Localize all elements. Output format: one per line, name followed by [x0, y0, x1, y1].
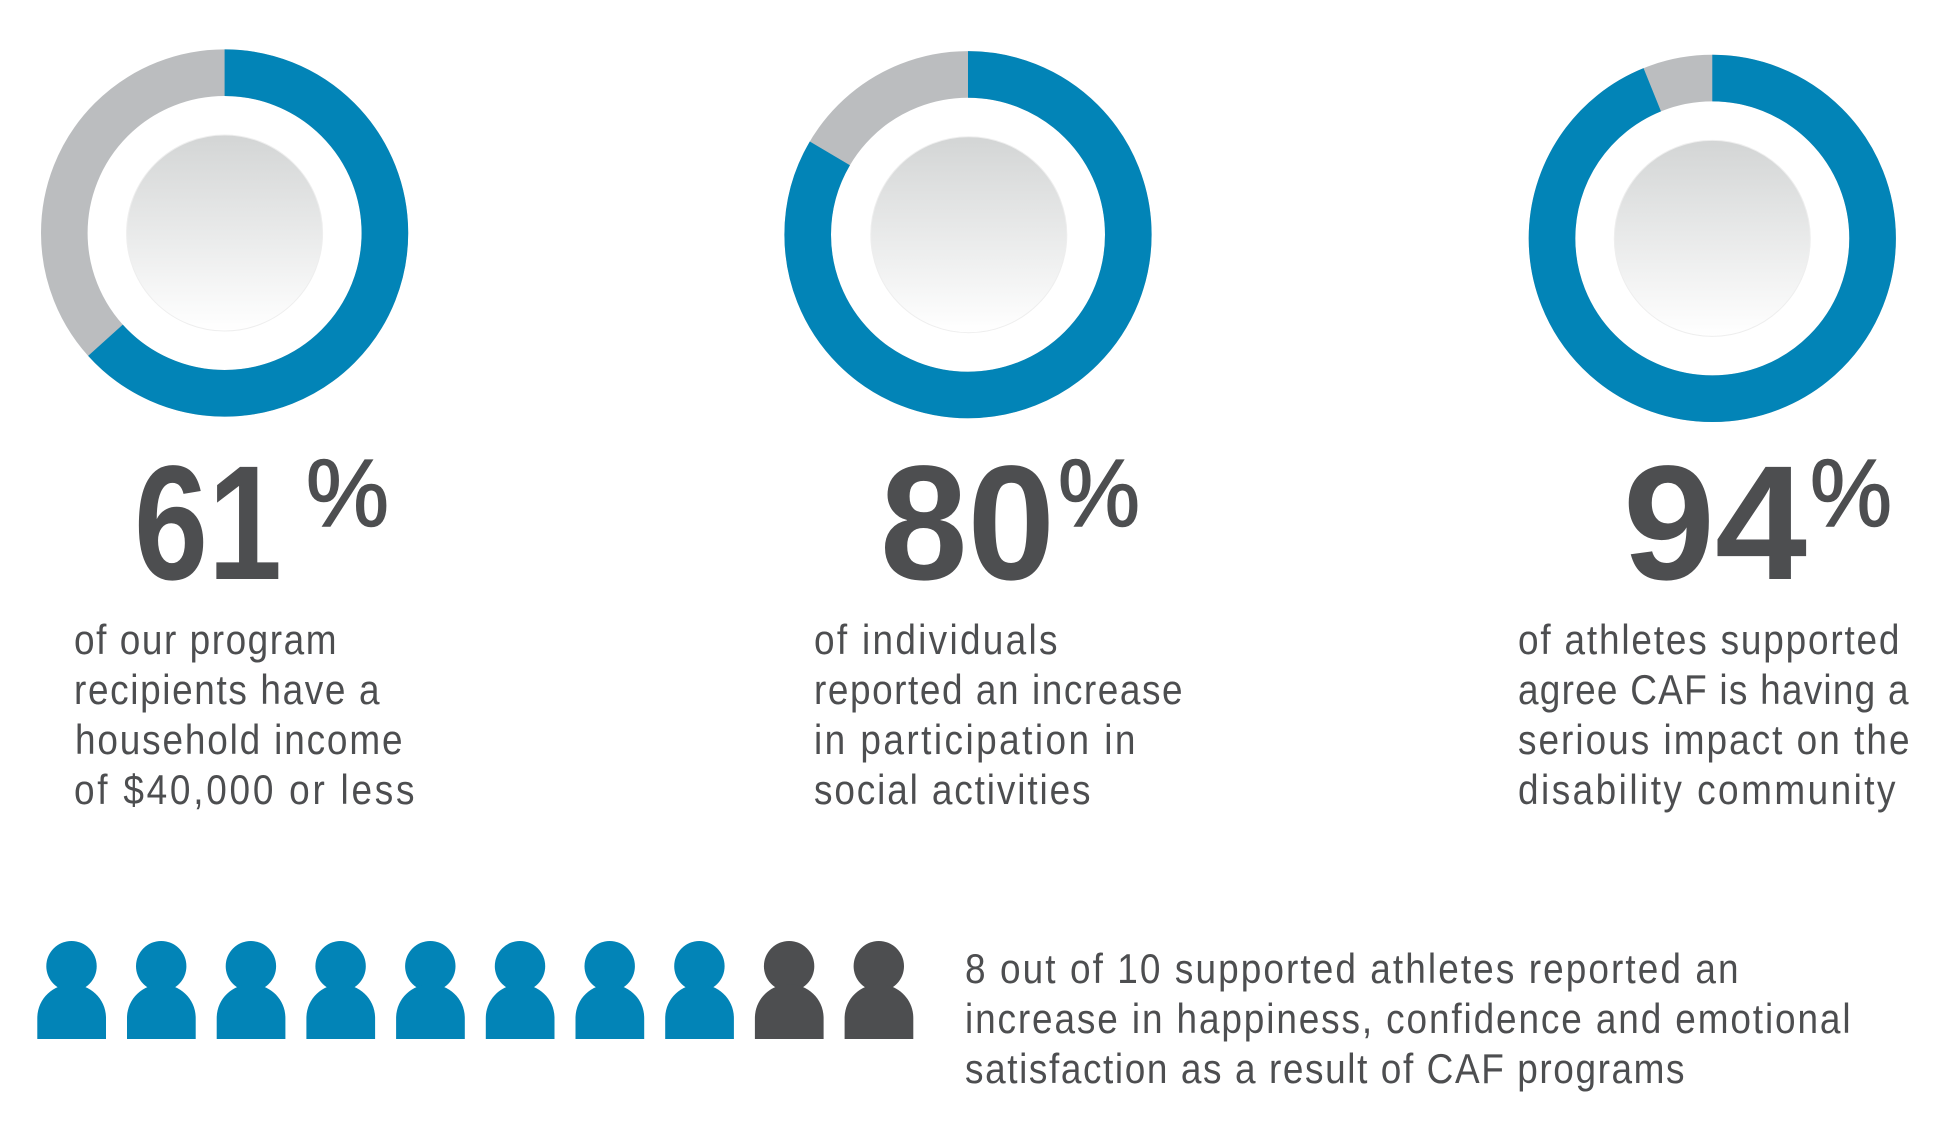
icon: person 8 — [665, 941, 734, 1039]
big number: 61%: 61 — [134, 431, 282, 614]
description: 61 percent: household income — [75, 717, 403, 764]
description: 94 percent: agree CAF is having a — [1518, 667, 1909, 714]
icon: person 7 — [576, 941, 644, 1039]
icon: person 5 — [396, 941, 465, 1039]
panel: 94 percent statistic — [1518, 78, 1910, 814]
description: 80 percent: reported an increase — [814, 667, 1183, 714]
description: 80 percent: in participation in — [814, 717, 1135, 764]
pictogram: ten people, eight highlighted — [37, 941, 913, 1039]
icon: person 9 — [755, 941, 824, 1039]
big number: 94% — [1623, 431, 1892, 614]
panel: 8 out of 10 athletes — [37, 941, 1851, 1093]
icon: person 4 — [306, 941, 375, 1039]
description: 94 percent: disability community — [1518, 767, 1896, 814]
big number: 80% — [880, 431, 1140, 614]
icon: person 10 — [845, 941, 913, 1039]
icon: person 2 — [127, 941, 196, 1039]
description: 61 percent: of our program — [74, 617, 337, 664]
big number: 80%: % — [1058, 440, 1140, 547]
donut chart: 94 percent — [1552, 78, 1873, 399]
description: 61 percent — [74, 617, 414, 814]
icon: person 6 — [486, 941, 554, 1039]
description: 80 percent: of individuals — [814, 617, 1057, 664]
description: 8 out of 10 athletes — [965, 946, 1851, 1093]
description: 94 percent: serious impact on the — [1518, 717, 1910, 764]
description: 8 out of 10 athletes: satisfaction as a result of CAF programs — [965, 1046, 1684, 1093]
donut chart: 80 percent — [808, 74, 1128, 395]
description: 80 percent: social activities — [814, 767, 1090, 814]
description: 94 percent — [1518, 617, 1910, 814]
description: 8 out of 10 athletes: increase in happiness, confidence and emotional — [965, 996, 1851, 1043]
big number: 80%: 80 — [880, 431, 1055, 614]
donut chart: 61 percent — [64, 73, 385, 393]
big number: 61%: % — [306, 440, 389, 547]
big number: 94%: 94 — [1623, 431, 1807, 614]
icon: person 3 — [217, 941, 285, 1039]
icon: person 1 — [37, 941, 106, 1039]
description: 61 percent: recipients have a — [74, 667, 380, 714]
description: 80 percent — [814, 617, 1183, 814]
description: 94 percent: of athletes supported — [1518, 617, 1899, 664]
big number: 94%: % — [1810, 440, 1892, 547]
description: 61 percent: of $40,000 or less — [74, 767, 414, 814]
panel: 61 percent statistic — [64, 73, 414, 814]
panel: 80 percent statistic — [808, 74, 1183, 814]
description: 8 out of 10 athletes: 8 out of 10 supported athletes reported an — [965, 946, 1739, 993]
